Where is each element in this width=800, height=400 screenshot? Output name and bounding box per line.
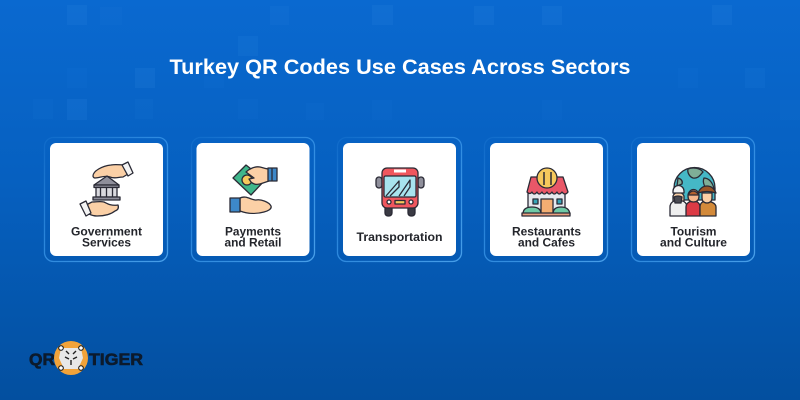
panel: Transportation — [338, 138, 462, 262]
background pattern — [33, 5, 800, 120]
panel: Tourism and Culture — [632, 138, 754, 262]
icon: money exchange — [230, 165, 277, 213]
label: Payments — [225, 226, 281, 238]
title: Turkey QR Codes Use Cases Across Sectors — [170, 56, 630, 79]
logo: QR TIGER: QR — [29, 350, 55, 369]
icon: bus — [376, 168, 424, 216]
panel: Payments and Retail — [192, 138, 314, 262]
panel: Government Services — [44, 138, 168, 262]
logo: QR TIGER — [29, 341, 143, 375]
icon: globe with tourists — [670, 168, 716, 216]
icon: hands with bank building — [80, 162, 133, 216]
panel: Restaurants and Cafes: and Cafes — [518, 238, 575, 250]
panel: Government Services: Services — [82, 238, 131, 250]
panel: Tourism and Culture: and Culture — [660, 238, 727, 250]
panel: Restaurants and Cafes — [484, 138, 608, 262]
logo: QR TIGER: TIGER — [89, 350, 143, 369]
icon: restaurant — [522, 168, 570, 216]
label: Transportation — [356, 232, 442, 244]
label: Government — [71, 226, 142, 238]
icon: tiger emblem — [54, 341, 88, 375]
label: Restaurants — [512, 226, 581, 238]
label: Tourism — [670, 226, 716, 238]
panel: Payments and Retail: and Retail — [224, 238, 282, 250]
